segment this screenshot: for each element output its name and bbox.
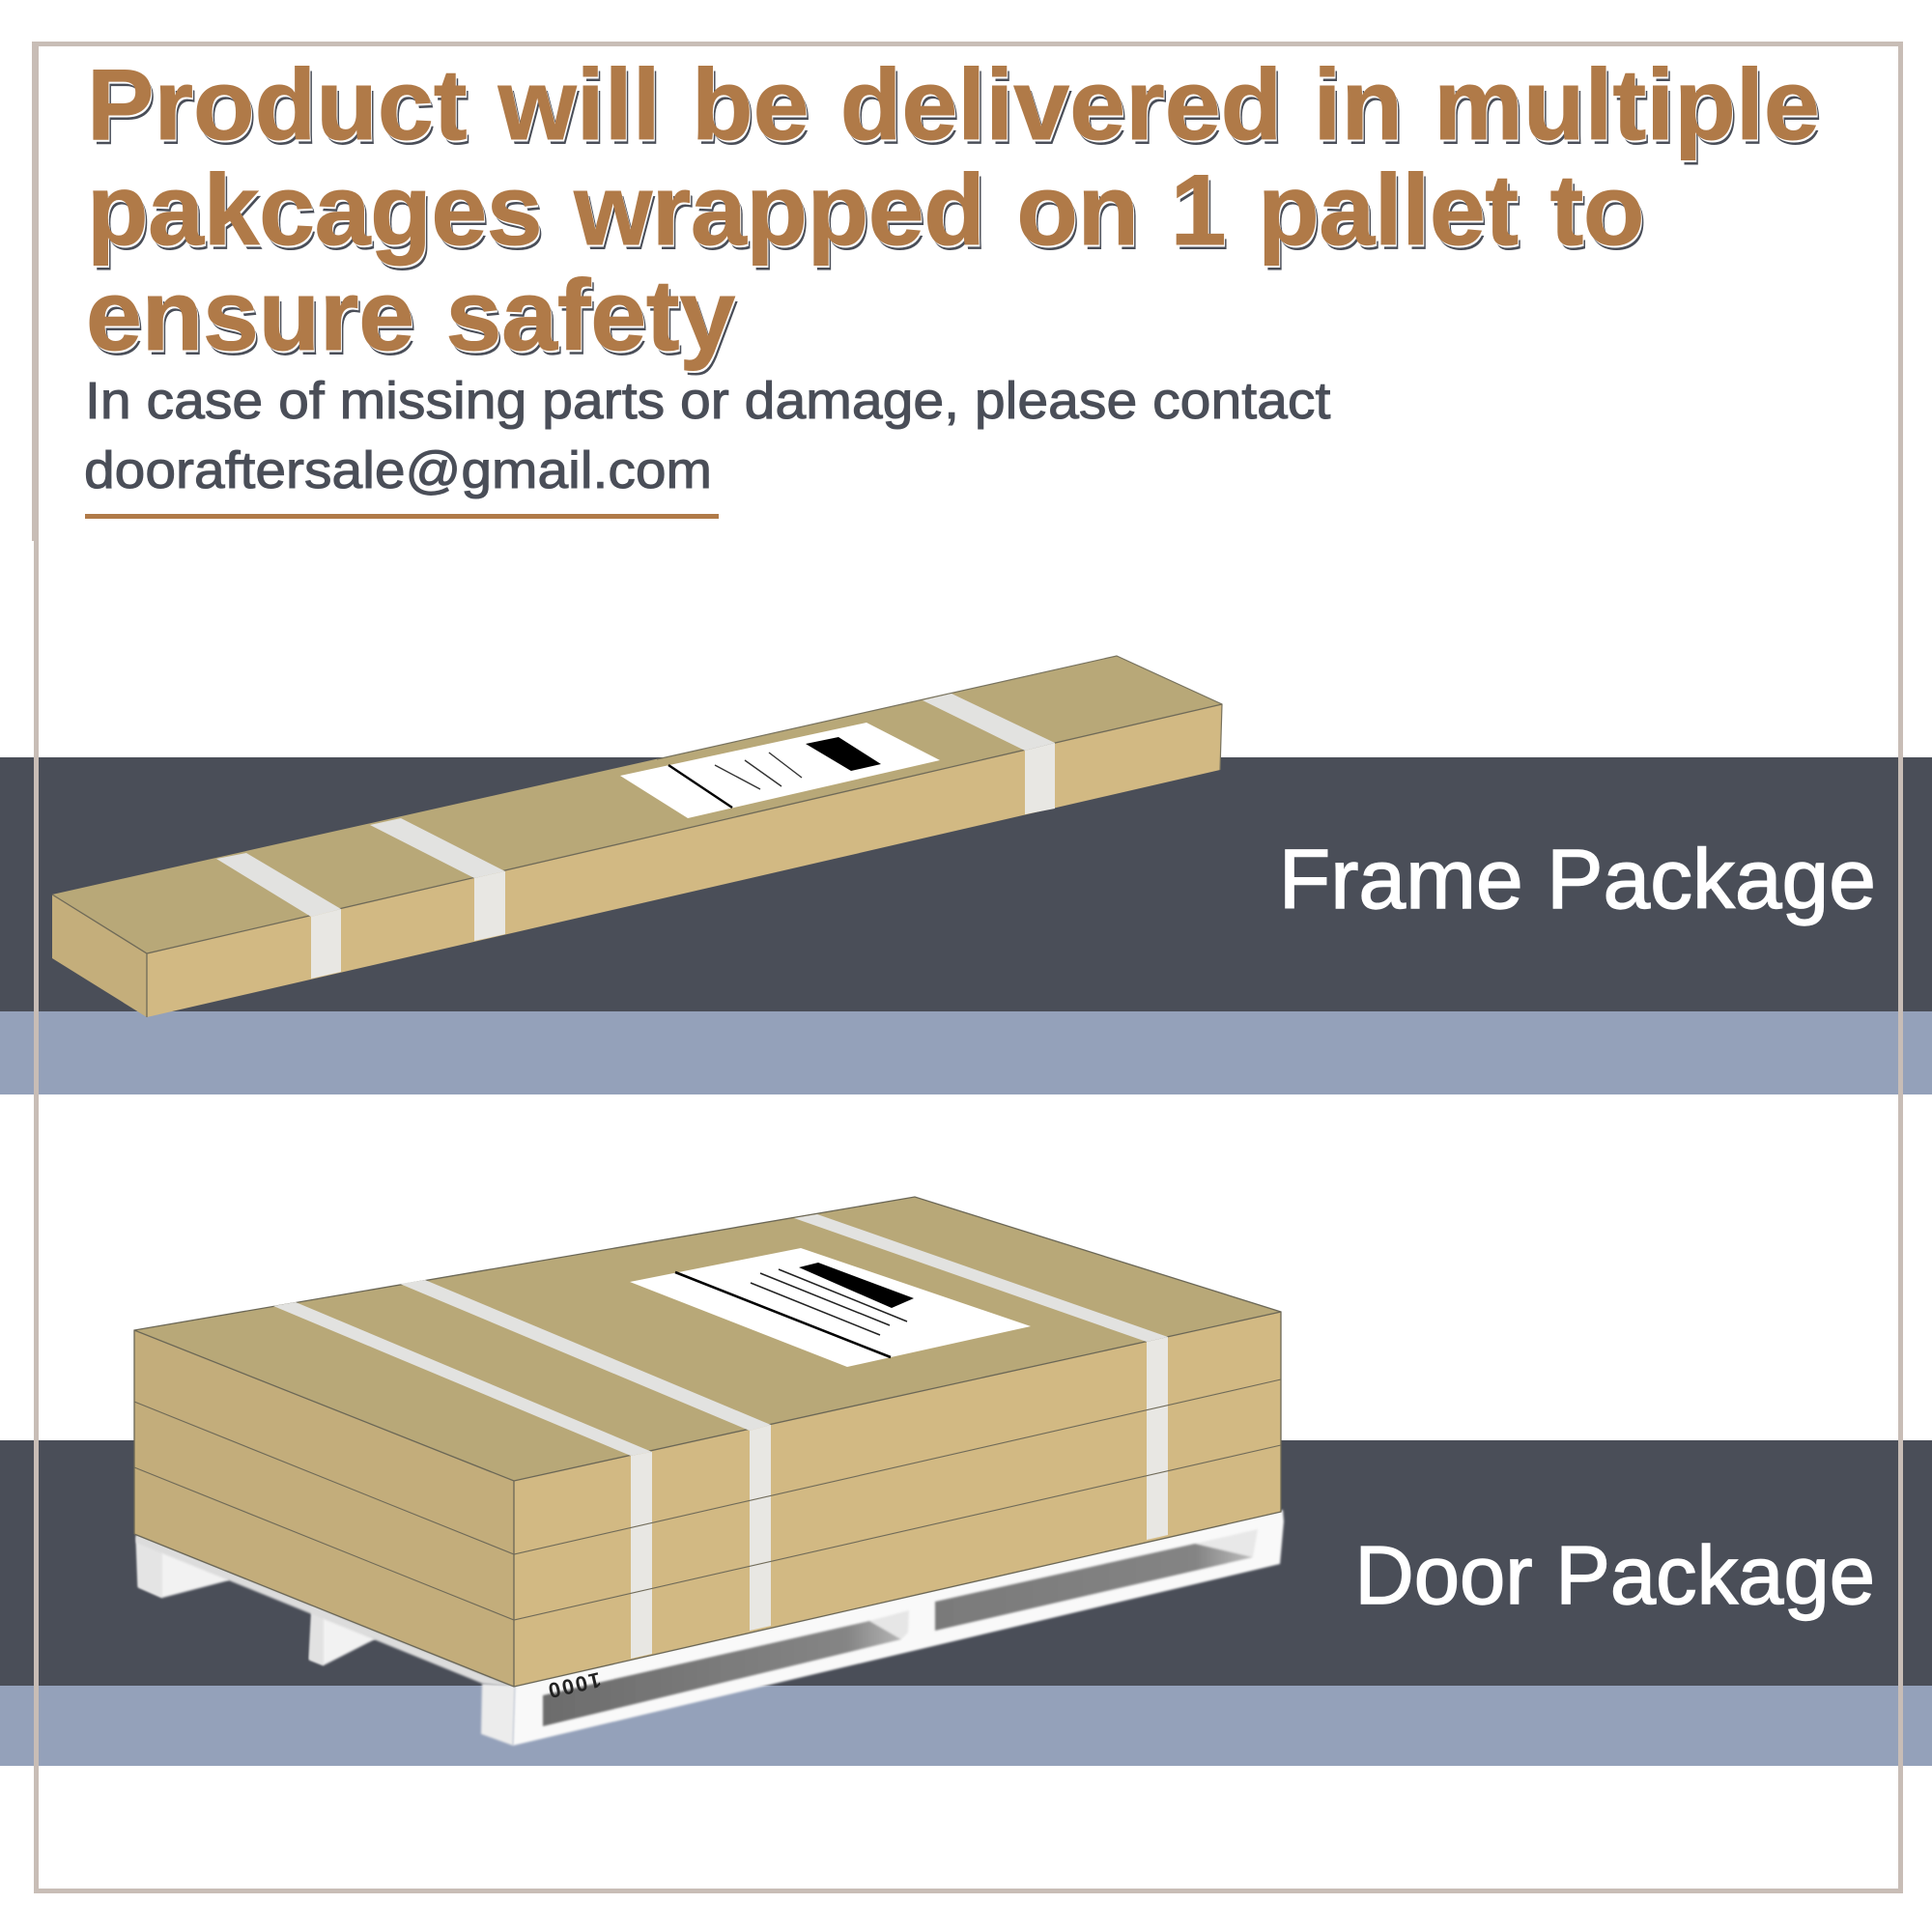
frame strap 2	[370, 818, 505, 878]
frame strap 3	[923, 694, 1055, 751]
pallet slot 2 end	[1195, 1529, 1258, 1557]
door box outline	[134, 1197, 1281, 1687]
door box front face	[514, 1312, 1281, 1687]
door strap 2	[400, 1280, 771, 1431]
pallet front plank	[513, 1510, 1284, 1746]
door box top face	[134, 1197, 1281, 1481]
door band dark	[0, 1440, 1932, 1686]
frame box front face	[147, 704, 1222, 1017]
frame package box	[52, 656, 1222, 1017]
frame strap 3 front	[1025, 743, 1055, 814]
pallet corner block	[481, 1684, 515, 1746]
frame shipping label	[620, 723, 940, 818]
contact text line 1: In case of missing parts or damage, please contact	[85, 372, 1330, 430]
frame label thick line	[668, 765, 732, 808]
frame box front edges	[52, 704, 1222, 1017]
pallet middle leg	[309, 1605, 377, 1665]
email underline	[85, 514, 719, 519]
frame box back edges	[657, 656, 1222, 770]
frame strap 1 front	[311, 909, 341, 979]
pallet slot 1	[543, 1621, 901, 1726]
door box side face	[134, 1330, 514, 1687]
frame label text lines	[715, 753, 802, 789]
door package label: Door Package	[1354, 1530, 1875, 1622]
frame strap 1	[216, 853, 341, 917]
frame band light	[0, 1011, 1932, 1094]
title line 1: Product will be delivered in multiple	[87, 49, 1820, 161]
frame strap 2 front	[474, 871, 505, 941]
frame label barcode	[806, 737, 881, 771]
door strap 2 front	[750, 1425, 771, 1631]
pallet stamp: 1000	[544, 1667, 603, 1703]
door label barcode	[799, 1263, 914, 1308]
frame label sheet	[620, 723, 940, 818]
pallet	[136, 1510, 1284, 1746]
title line 2: pakcages wrapped on 1 pallet to	[87, 155, 1644, 267]
door strap 1 front	[631, 1452, 652, 1659]
pallet side rail	[136, 1534, 514, 1687]
pallet back leg	[136, 1536, 229, 1598]
door strap 3 front	[1147, 1337, 1168, 1540]
pallet back leg shade	[136, 1536, 162, 1598]
frame package label: Frame Package	[1279, 832, 1876, 926]
door package on pallet	[134, 1197, 1284, 1746]
door band light	[0, 1686, 1932, 1766]
frame box top face	[52, 656, 1222, 953]
door shipping label	[630, 1248, 1031, 1367]
door label thick line	[675, 1272, 891, 1357]
door strap 3	[794, 1214, 1168, 1342]
pallet slot 2	[935, 1544, 1253, 1631]
door label text lines	[751, 1269, 907, 1335]
frame band dark	[0, 757, 1932, 1011]
pallet middle leg shade	[309, 1605, 324, 1665]
door label sheet	[630, 1248, 1031, 1367]
header block	[84, 49, 1820, 519]
contact email: dooraftersale@gmail.com	[84, 441, 712, 499]
pallet slot 1 end	[869, 1610, 909, 1639]
door box layer lines	[134, 1379, 1281, 1620]
frame box side face	[52, 895, 147, 1017]
title line 3: ensure safety	[86, 260, 735, 372]
door strap 1	[273, 1302, 652, 1456]
